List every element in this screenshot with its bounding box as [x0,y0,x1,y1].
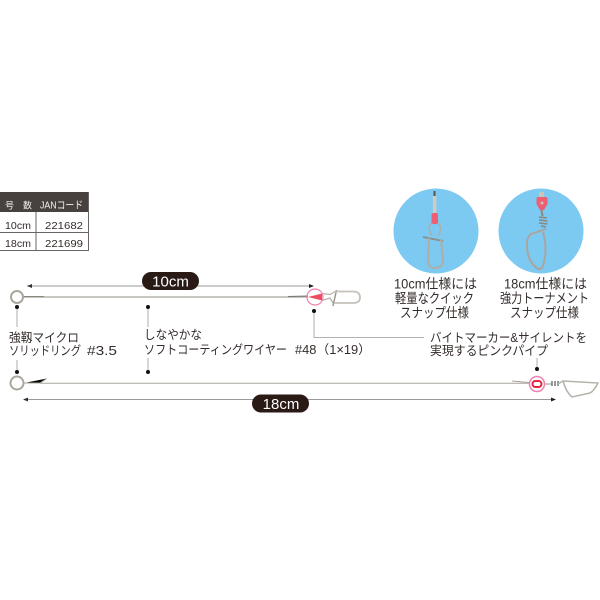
table: size and JAN code: 18cm [5,238,31,250]
label: ring [9,305,117,374]
10cm rig [11,289,360,306]
table: size and JAN code: 10cm [5,220,31,232]
table: size and JAN code: 221699 [45,238,83,250]
label: wire: しなやかな [144,328,202,342]
label: pink pipe [312,309,587,371]
label: ring: 強靱マイクロ [9,331,79,345]
table: size and JAN code: 号 [5,200,14,210]
caption: 18cm spec [500,276,589,320]
label: ring: ソリッドリング [9,344,81,358]
dimension arrow: 18cm [23,394,556,413]
dimension arrow: 10cm [27,272,314,290]
caption: 10cm spec: スナップ仕様 [400,306,469,320]
18cm rig [10,376,598,397]
table: size and JAN code: JANコード [40,200,83,212]
label: wire [144,305,371,374]
table: size and JAN code [0,192,89,251]
label: ring: #3.5 [87,344,117,358]
label: pink pipe: 実現するピンクパイプ [430,343,548,358]
caption: 10cm spec: 軽量なクイック [395,291,474,306]
circle detail: 18cm tournament snap [498,188,584,274]
circle detail: 10cm quick snap [394,188,478,274]
label: wire: #48（1×19） [295,343,371,357]
label: wire: ソフトコーティングワイヤー [144,343,287,357]
caption: 18cm spec: 18cm仕様には [504,276,587,292]
caption: 18cm spec: スナップ仕様 [510,306,579,320]
dimension arrow: 18cm: 18cm [263,396,299,413]
table: size and JAN code: 221682 [45,220,83,232]
table: size and JAN code: 数 [23,200,32,210]
caption: 10cm spec: 10cm仕様には [394,276,477,292]
caption: 10cm spec [394,276,477,320]
label: pink pipe: バイトマーカー&サイレントを [430,331,587,345]
dimension arrow: 10cm: 10cm [152,274,189,290]
